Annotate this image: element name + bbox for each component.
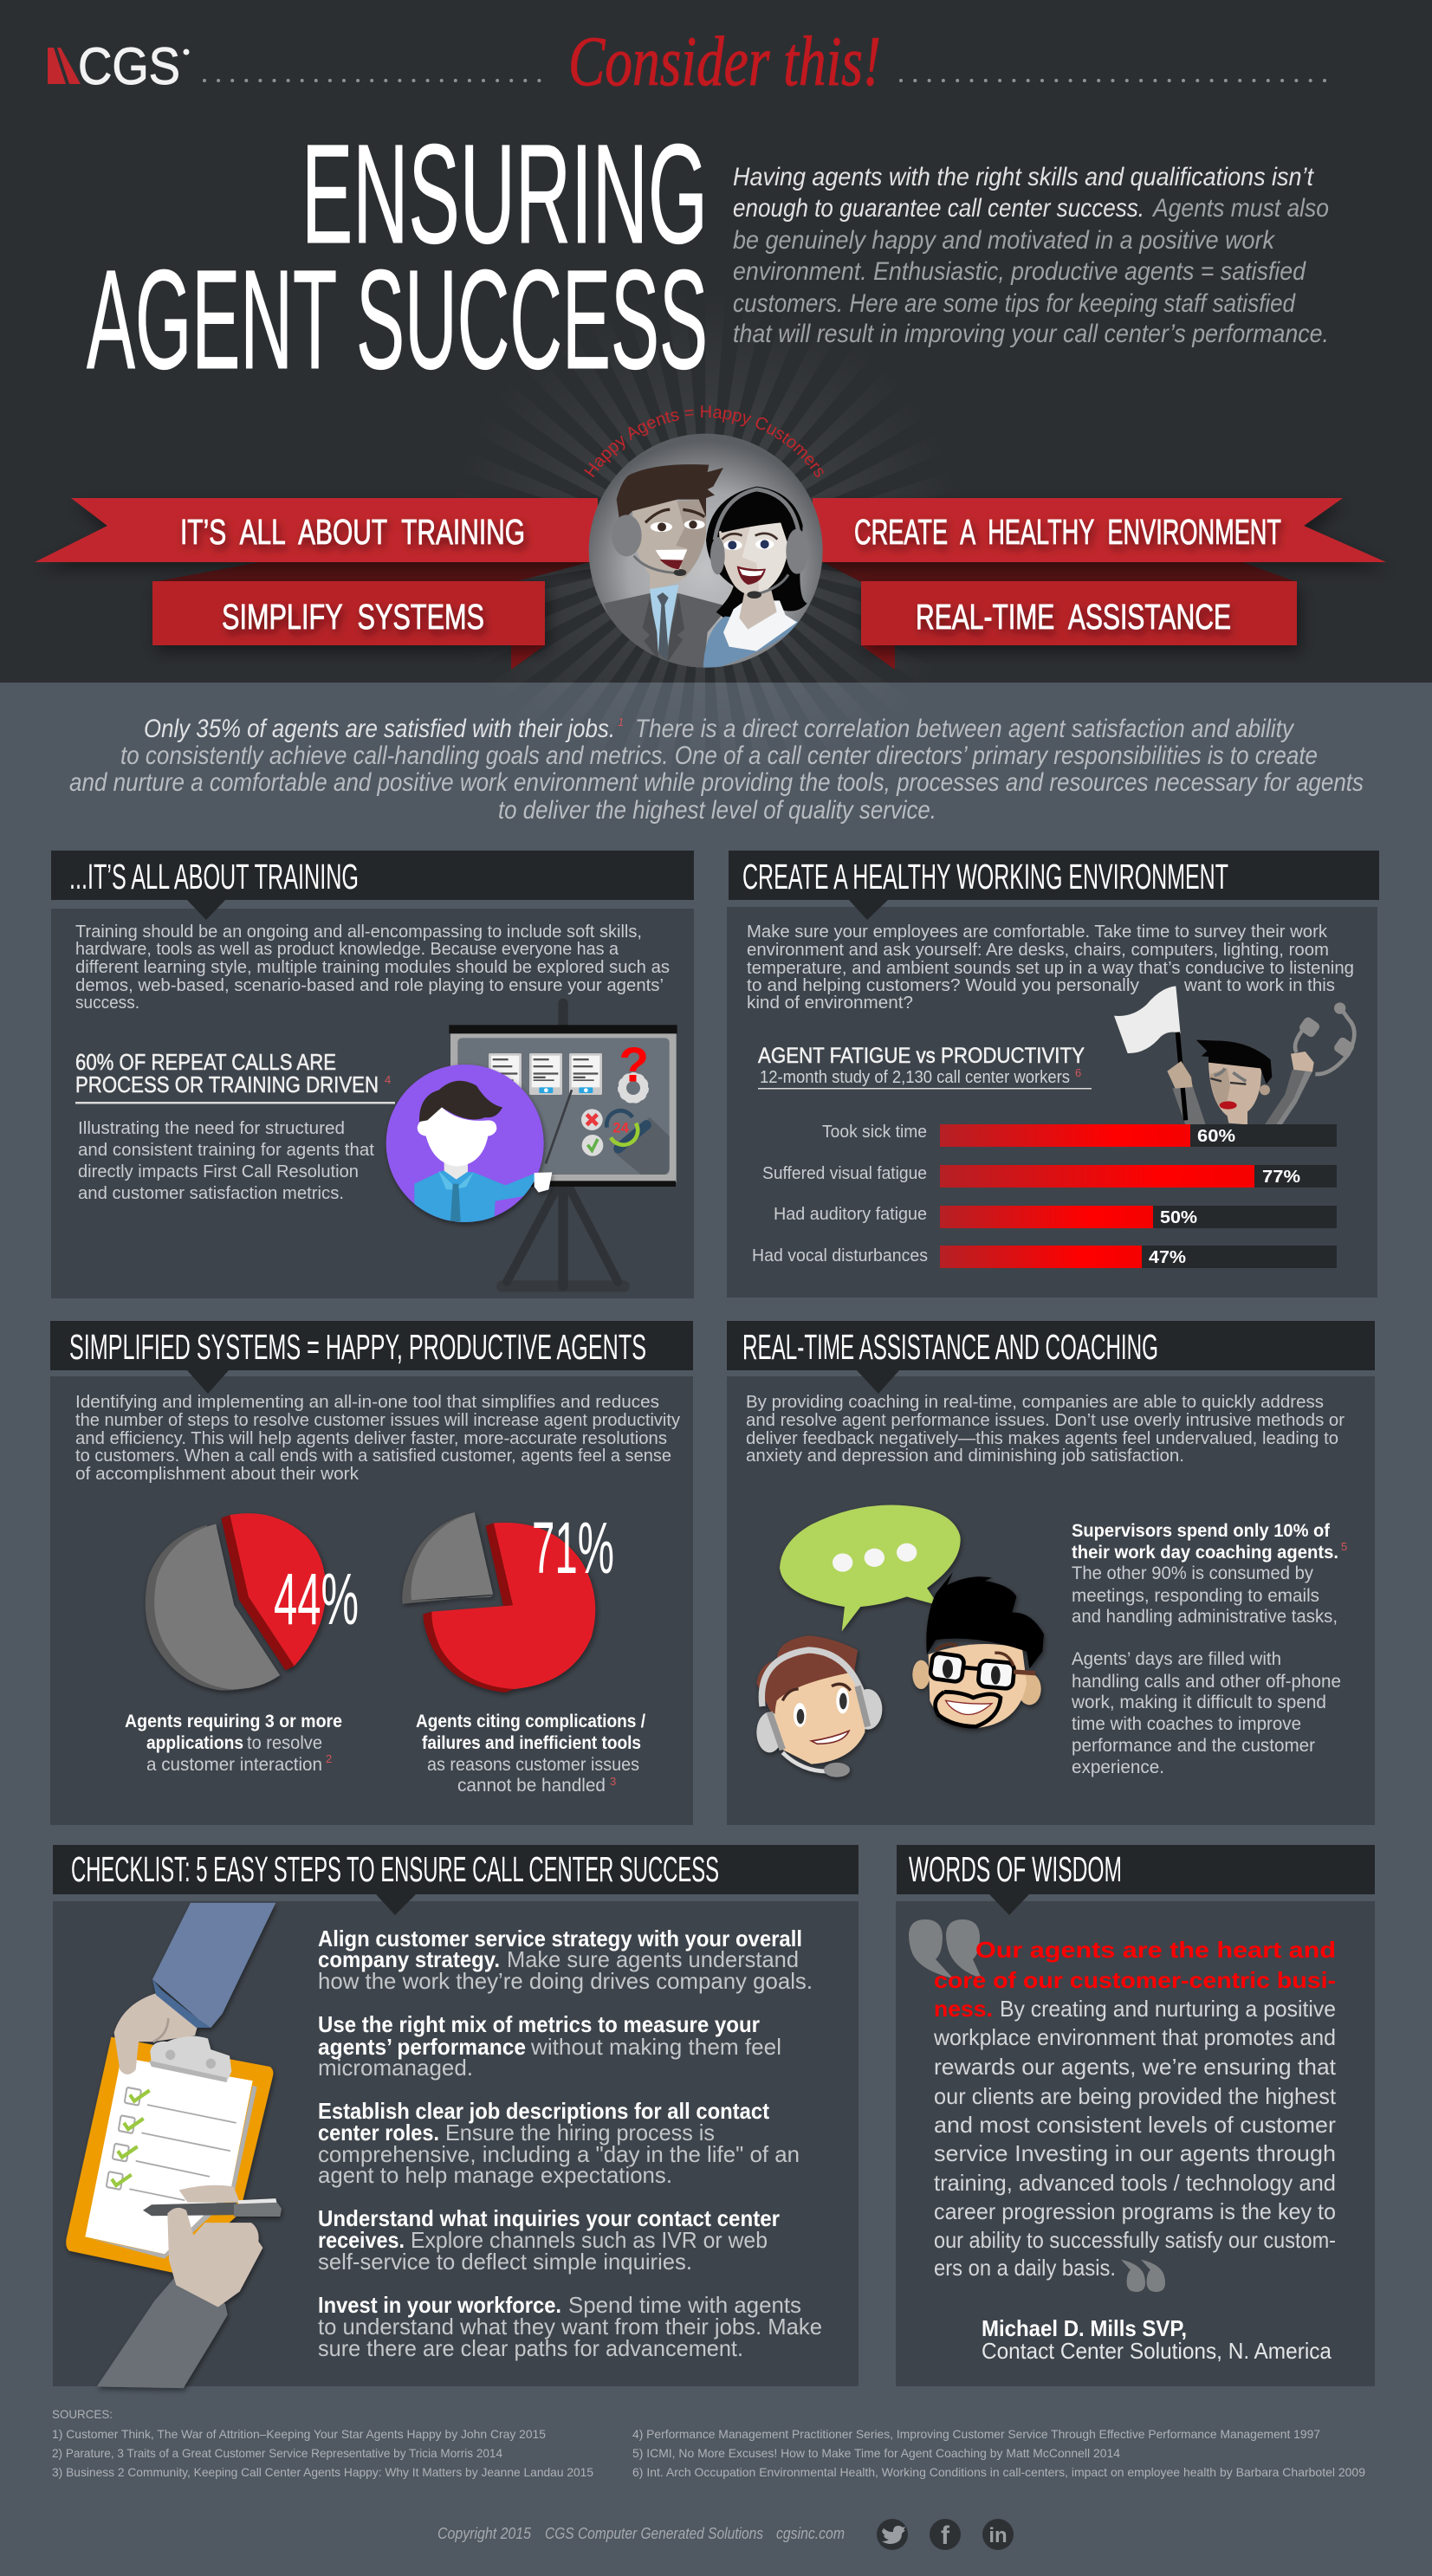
icon: closing quote marks	[1121, 2260, 1165, 2292]
pie caption: applications	[125, 1712, 342, 1775]
pie caption: complications: cannot be handled	[457, 1776, 606, 1796]
copyright: CGS Computer Generated Solutions	[545, 2525, 763, 2542]
coaching stat text: 5	[1341, 1540, 1347, 1553]
training supporting text: and customer satisfaction metrics.	[78, 1184, 344, 1203]
heading: real-time assistance and coaching: REAL-TIME ASSISTANCE AND COACHING	[742, 1327, 1158, 1367]
heading: words of wisdom	[897, 1845, 1375, 1915]
environment body text: Make sure your employees are comfortable. Take time to survey their work	[747, 922, 1328, 942]
female agent	[703, 487, 808, 673]
quote text: ness.	[934, 1996, 993, 2022]
lead paragraph: 1	[618, 715, 624, 728]
step 3: Establish clear job descriptions for all contact	[318, 2098, 769, 2124]
bar: took sick time 60%	[822, 1123, 1337, 1147]
step 5	[318, 2292, 822, 2361]
pie caption: applications: applications	[146, 1733, 243, 1753]
pie caption: complications: failures and inefficient tools	[422, 1733, 641, 1753]
quote text: and most consistent levels of customer	[934, 2112, 1336, 2138]
icon: clipboard in hands	[66, 1903, 282, 2388]
sources: 1) Customer Think, The War of Attrition–Keeping Your Star Agents Happy by John Cray 2015	[52, 2427, 546, 2441]
callout: 60% of repeat calls: 60% OF REPEAT CALLS ARE	[75, 1049, 336, 1075]
environment body text: to and helping customers? Would you personally	[747, 976, 1139, 995]
title: ENSURING	[301, 114, 708, 273]
systems body text: Identifying and implementing an all-in-one tool that simplifies and reduces	[75, 1393, 659, 1412]
quote text: career progression programs is the key to	[934, 2198, 1336, 2224]
step 3: comprehensive, including a "day in the life" of an	[318, 2141, 800, 2167]
bar: suffered visual fatigue 77%: Suffered visual fatigue	[762, 1164, 927, 1183]
sources: 2) Parature, 3 Traits of a Great Customer Service Representative by Tricia Morris 2014	[52, 2446, 502, 2460]
coaching stat text: experience.	[1072, 1757, 1164, 1777]
systems body text	[75, 1393, 680, 1484]
environment body text: environment and ask yourself: Are desks, chairs, computers, lighting, room	[747, 941, 1329, 960]
quote text: core of our customer-centric busi-	[934, 1967, 1336, 1993]
systems body text: and efficiency. This will help agents deliver faster, more-accurate resolutions	[75, 1429, 667, 1448]
training supporting text: directly impacts First Call Resolution	[78, 1162, 359, 1181]
heading: checklist: CHECKLIST: 5 EASY STEPS TO ENSURE CALL CENTER SUCCESS	[71, 1849, 719, 1889]
panel: simplified systems	[50, 1321, 693, 1825]
quote text: By creating and nurturing a positive	[1000, 1996, 1336, 2022]
heading: real-time assistance and coaching	[727, 1321, 1375, 1394]
logo: CGS: CGS	[78, 37, 180, 95]
intro paragraph	[733, 163, 1329, 348]
quote text: ers on a daily basis.	[934, 2255, 1116, 2281]
panel: checklist	[53, 1845, 859, 2388]
chart title: agent fatigue vs productivity: 6	[1075, 1066, 1081, 1079]
step 4	[318, 2205, 780, 2275]
step 4: Explore channels such as IVR or web	[411, 2227, 768, 2253]
step 2: Use the right mix of metrics to measure your	[318, 2011, 760, 2037]
intro paragraph: Having agents with the right skills and qualifications isn’t	[733, 163, 1314, 191]
environment body text: kind of environment?	[747, 994, 913, 1013]
pie chart: 44%	[146, 1513, 359, 1690]
training supporting text	[78, 1119, 374, 1203]
icon: coach with glasses	[912, 1572, 1044, 1728]
coaching stat text: work, making it difficult to spend	[1071, 1693, 1326, 1712]
step 1: Make sure agents understand	[507, 1946, 799, 1972]
quote text: workplace environment that promotes and	[933, 2024, 1336, 2050]
pie caption: complications: 3	[610, 1775, 616, 1788]
coaching stat text: their work day coaching agents.	[1072, 1543, 1338, 1563]
panel: words of wisdom	[896, 1845, 1375, 2386]
step 2: micromanaged.	[318, 2055, 473, 2081]
intro paragraph: be genuinely happy and motivated in a positive work	[733, 226, 1276, 255]
ribbon: simplify systems	[152, 581, 545, 645]
callout: 60% of repeat calls: PROCESS OR TRAINING DRIVEN	[75, 1071, 379, 1097]
sunburst rays	[575, 421, 835, 681]
lead paragraph: to deliver the highest level of quality service.	[498, 796, 936, 825]
bar: had vocal disturbances 47%	[752, 1246, 1337, 1268]
step 3: Ensure the hiring process is	[445, 2120, 715, 2146]
pie caption: applications: a customer interaction	[146, 1755, 322, 1775]
systems body text: of accomplishment about their work	[75, 1465, 360, 1484]
step 5: Spend time with agents	[568, 2292, 801, 2318]
icon: presentation board	[449, 1003, 677, 1292]
icon: presenter avatar	[386, 1065, 552, 1227]
training supporting text: Illustrating the need for structured	[78, 1119, 345, 1138]
icon: presentation board: ?	[619, 1038, 649, 1092]
male agent	[604, 464, 728, 673]
sources: 4) Performance Management Practitioner Series, Improving Customer Service Through Effective Performance Management 1997	[632, 2427, 1320, 2441]
training body text: success.	[75, 994, 139, 1013]
quote text: our ability to successfully satisfy our custom-	[934, 2227, 1336, 2253]
pie chart: 71%: 71%	[532, 1507, 614, 1589]
bar: had vocal disturbances 47%: Had vocal disturbances	[752, 1246, 928, 1265]
quote text: Our agents are the heart and	[975, 1937, 1336, 1963]
icon: agents globe	[589, 434, 823, 673]
copyright	[437, 2525, 845, 2542]
lead paragraph: There is a direct correlation between agent satisfaction and ability	[635, 715, 1295, 743]
pie caption: complications: Agents citing complications /	[416, 1712, 645, 1731]
step 3: center roles.	[318, 2120, 439, 2146]
icon: opening quote marks	[909, 1919, 982, 1978]
title: AGENT SUCCESS	[87, 240, 708, 398]
bar: took sick time 60%: Took sick time	[822, 1123, 927, 1142]
sources: 6) Int. Arch Occupation Environmental Health, Working Conditions in call-centers, impact on employee health by Barbara Charbotel 2009	[632, 2465, 1365, 2479]
step 4: self-service to deflect simple inquiries.	[318, 2249, 692, 2275]
panel: healthy environment	[727, 851, 1379, 1298]
quote text	[933, 1937, 1337, 2281]
environment body text	[747, 922, 1354, 1013]
training body text: different learning style, multiple training modules should be explored such as	[75, 958, 670, 977]
bar chart: fatigue	[752, 1123, 1337, 1268]
sources: 3) Business 2 Community, Keeping Call Center Agents Happy: Why It Matters by Jeanne Landau 2015	[52, 2465, 593, 2479]
step 4: receives.	[318, 2227, 405, 2253]
pie caption: complications	[416, 1712, 645, 1796]
ribbon folds and tails	[152, 562, 1297, 670]
ribbon: real-time assistance	[861, 581, 1297, 645]
bar: had vocal disturbances 47%: 47%	[1149, 1248, 1186, 1267]
training supporting text: and consistent training for agents that	[78, 1141, 374, 1160]
training body text: demos, web-based, scenario-based and role playing to ensure your agents’	[75, 976, 664, 995]
dotted rule left	[204, 79, 553, 82]
lead paragraph: Only 35% of agents are satisfied with their jobs.	[144, 715, 615, 743]
bar: had auditory fatigue 50%: Had auditory fatigue	[774, 1205, 927, 1224]
ribbon: it's all about training	[35, 498, 598, 562]
intro paragraph: Agents must also	[1151, 194, 1329, 223]
training body text	[75, 922, 670, 1013]
curved tagline: Happy Agents = Happy Customers	[584, 405, 824, 478]
intro paragraph: environment. Enthusiastic, productive agents = satisfied	[733, 257, 1306, 286]
pie caption: applications: Agents requiring 3 or more	[125, 1712, 342, 1731]
heading: Consider this!: Consider this!	[568, 22, 881, 100]
pie caption: complications: as reasons customer issues	[427, 1755, 639, 1775]
intro paragraph: enough to guarantee call center success.	[733, 194, 1144, 223]
step 5: Invest in your workforce.	[318, 2292, 561, 2318]
quote text: service Investing in our agents through	[934, 2140, 1336, 2166]
icon: twitter	[877, 2519, 908, 2550]
step 3: agent to help manage expectations.	[318, 2162, 672, 2188]
panel: real-time assistance	[727, 1321, 1375, 1825]
step 3	[318, 2098, 800, 2188]
sources	[52, 2407, 1365, 2479]
sources: SOURCES:	[52, 2407, 113, 2421]
environment body text: want to work in this	[1183, 976, 1335, 995]
quote text: training, advanced tools / technology and	[934, 2170, 1336, 2196]
step 1: Align customer service strategy with your overall	[318, 1926, 802, 1951]
systems body text: the number of steps to resolve customer issues will increase agent productivity	[75, 1411, 680, 1430]
step 2: without making them feel	[530, 2034, 781, 2060]
bar: suffered visual fatigue 77%	[762, 1164, 1337, 1188]
ribbon: it's all about training: IT’S ALL ABOUT TRAINING	[180, 512, 525, 552]
coaching stat text: handling calls and other off-phone	[1072, 1672, 1341, 1692]
coaching body text: and resolve agent performance issues. Don’t use overly intrusive methods or	[746, 1411, 1345, 1430]
coaching body text	[746, 1393, 1345, 1466]
coaching body text: deliver feedback negatively—this makes agents feel undervalued, leading to	[746, 1429, 1338, 1448]
heading: checklist	[53, 1845, 859, 1915]
coaching body text: By providing coaching in real-time, companies are able to quickly address	[746, 1393, 1324, 1412]
step 5: sure there are clear paths for advancement.	[318, 2335, 743, 2361]
coaching body text: anxiety and depression and diminishing job satisfaction.	[746, 1447, 1184, 1466]
quote attribution: Michael D. Mills SVP,	[982, 2315, 1187, 2341]
bar: had auditory fatigue 50%	[774, 1205, 1337, 1228]
pie chart: 71%	[402, 1507, 614, 1693]
quote attribution: Contact Center Solutions, N. America	[982, 2338, 1332, 2364]
callout: 60% of repeat calls	[75, 1049, 395, 1104]
coaching stat text: time with coaches to improve	[1072, 1714, 1301, 1734]
training body text: hardware, tools as well as product knowledge. Because everyone has a	[75, 940, 619, 959]
coaching stat text: performance and the customer	[1072, 1736, 1315, 1756]
pie chart: 44%: 44%	[274, 1558, 359, 1640]
intro paragraph: that will result in improving your call center’s performance.	[733, 320, 1329, 348]
callout: 60% of repeat calls: 4	[385, 1073, 391, 1086]
coaching stat text: Agents’ days are filled with	[1072, 1649, 1281, 1669]
step 2: agents’ performance	[318, 2034, 526, 2060]
ribbon: create a healthy environment	[813, 498, 1386, 562]
heading: words of wisdom: WORDS OF WISDOM	[909, 1849, 1122, 1889]
pie caption: applications: to resolve	[247, 1733, 322, 1753]
pie caption: applications: 2	[326, 1752, 332, 1765]
quote attribution	[982, 2315, 1332, 2364]
intro paragraph: customers. Here are some tips for keeping staff satisfied	[733, 289, 1296, 318]
icon: linkedin	[982, 2519, 1014, 2550]
ribbon: real-time assistance: REAL-TIME ASSISTANCE	[916, 597, 1231, 637]
coaching stat text	[1071, 1521, 1347, 1777]
icon: speech bubble	[780, 1505, 961, 1631]
coaching stat text: meetings, responding to emails	[1072, 1586, 1319, 1606]
icon: facebook: f	[941, 2521, 950, 2550]
step 5: to understand what they want from their jobs. Make	[318, 2314, 822, 2340]
step 4: Understand what inquiries your contact center	[318, 2205, 780, 2231]
icon: linkedin: in	[988, 2524, 1008, 2547]
systems body text: to customers. When a call ends with a satisfied customer, agents feel a sense	[75, 1447, 671, 1466]
chart title: agent fatigue vs productivity: AGENT FATIGUE vs PRODUCTIVITY	[758, 1044, 1085, 1068]
heading: create a healthy working environment	[729, 851, 1379, 920]
bar: had auditory fatigue 50%: 50%	[1160, 1208, 1197, 1227]
heading: it's all about training	[51, 851, 694, 920]
copyright: cgsinc.com	[776, 2525, 845, 2542]
copyright: Copyright 2015	[437, 2525, 532, 2542]
chart title: agent fatigue vs productivity: 12-month study of 2,130 call center workers	[760, 1068, 1070, 1087]
icon: facebook	[930, 2519, 961, 2550]
step 1	[318, 1926, 813, 1994]
heading: simplified systems: SIMPLIFIED SYSTEMS = HAPPY, PRODUCTIVE AGENTS	[69, 1327, 646, 1367]
sources: 5) ICMI, No More Excuses! How to Make Time for Agent Coaching by Matt McConnell 2014	[632, 2446, 1120, 2460]
heading: it's all about training: ...IT’S ALL ABOUT TRAINING	[69, 857, 359, 896]
coaching stat text: The other 90% is consumed by	[1072, 1563, 1313, 1583]
step 1: how the work they’re doing drives company goals.	[318, 1968, 813, 1994]
panel: training	[51, 851, 694, 1298]
coaching stat text: Supervisors spend only 10% of	[1072, 1521, 1331, 1541]
step 2	[318, 2011, 781, 2081]
bar: suffered visual fatigue 77%: 77%	[1262, 1168, 1300, 1187]
icon: fatigued agent with white flag	[1114, 986, 1356, 1124]
title	[87, 114, 708, 398]
quote text: rewards our agents, we’re ensuring that	[934, 2054, 1337, 2080]
icon: agent with headset	[756, 1635, 882, 1777]
ribbon: simplify systems: SIMPLIFY SYSTEMS	[222, 597, 484, 637]
quote text: our clients are being provided the highest	[934, 2083, 1337, 2109]
environment body text: temperature, and ambient sounds set up in a way that’s conducive to listening	[747, 959, 1354, 978]
bar: took sick time 60%: 60%	[1197, 1127, 1235, 1146]
dotted rule right	[901, 79, 1325, 82]
lead paragraph	[69, 715, 1364, 825]
training body text: Training should be an ongoing and all-encompassing to include soft skills,	[75, 922, 642, 942]
step 1: company strategy.	[318, 1946, 500, 1972]
icon: presentation board: 24	[612, 1119, 630, 1136]
coaching stat text: and handling administrative tasks,	[1072, 1607, 1338, 1627]
header background	[0, 0, 1432, 683]
heading: simplified systems	[50, 1321, 693, 1394]
chart title: agent fatigue vs productivity	[758, 1044, 1092, 1090]
